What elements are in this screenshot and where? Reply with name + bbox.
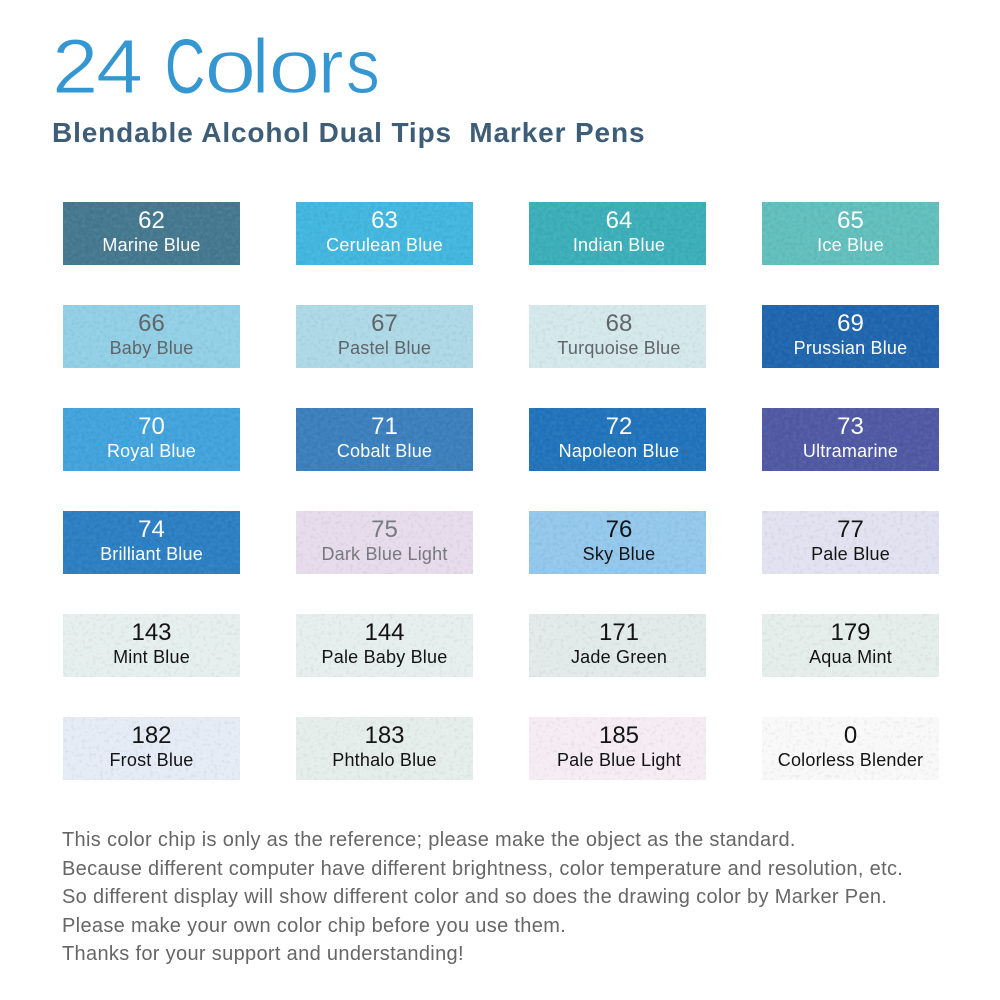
swatch: 76 Sky Blue: Sky Blue <box>583 544 655 564</box>
swatch: 171 Jade Green: 171 <box>599 619 639 646</box>
swatch: 185 Pale Blue Light <box>529 717 706 780</box>
swatch: 183 Phthalo Blue <box>296 717 473 780</box>
swatch: 65 Ice Blue: Ice Blue <box>817 235 884 255</box>
swatch: 77 Pale Blue: Pale Blue <box>811 544 890 564</box>
swatch: 64 Indian Blue: 64 <box>606 207 632 234</box>
swatch: 68 Turquoise Blue: Turquoise Blue <box>557 338 681 358</box>
title: 2 <box>52 24 98 110</box>
title: C <box>165 24 205 110</box>
swatch: 63 Cerulean Blue: Cerulean Blue <box>326 235 443 255</box>
swatch: 144 Pale Baby Blue: 144 <box>364 619 405 646</box>
swatch: 72 Napoleon Blue: Napoleon Blue <box>559 441 679 461</box>
swatch: 143 Mint Blue <box>63 614 240 677</box>
swatch: 77 Pale Blue <box>762 511 939 574</box>
swatch: 0 Colorless Blender <box>762 717 939 780</box>
disclaimer text: This color chip is only as the reference; please make the object as the standard. <box>62 829 796 851</box>
swatch: 179 Aqua Mint: 179 <box>830 619 871 646</box>
swatch: 67 Pastel Blue: 67 <box>371 310 398 337</box>
swatch: 182 Frost Blue <box>63 717 240 780</box>
swatch: 0 Colorless Blender: 0 <box>844 722 857 749</box>
swatch: 69 Prussian Blue: Prussian Blue <box>794 338 907 358</box>
swatch: 71 Cobalt Blue <box>296 408 473 471</box>
title: s <box>346 24 380 110</box>
swatch: 65 Ice Blue: 65 <box>837 207 864 234</box>
swatch: 64 Indian Blue: Indian Blue <box>573 235 665 255</box>
swatch: 75 Dark Blue Light: 75 <box>371 516 398 543</box>
title: r <box>318 24 344 110</box>
swatch: 62 Marine Blue <box>63 202 240 265</box>
swatch: 62 Marine Blue: Marine Blue <box>102 235 201 255</box>
swatch: 75 Dark Blue Light <box>296 511 473 574</box>
swatch: 69 Prussian Blue: 69 <box>837 310 864 337</box>
swatch: 74 Brilliant Blue: Brilliant Blue <box>100 544 203 564</box>
swatch: 67 Pastel Blue <box>296 305 473 368</box>
swatch: 66 Baby Blue <box>63 305 240 368</box>
swatch: 185 Pale Blue Light: Pale Blue Light <box>557 750 681 770</box>
swatch: 74 Brilliant Blue <box>63 511 240 574</box>
swatch: 171 Jade Green: Jade Green <box>571 647 667 667</box>
swatch: 71 Cobalt Blue: Cobalt Blue <box>337 441 432 461</box>
swatch: 76 Sky Blue: 76 <box>606 516 632 543</box>
swatch: 143 Mint Blue: Mint Blue <box>113 647 190 667</box>
swatch: 144 Pale Baby Blue <box>296 614 473 677</box>
swatch: 183 Phthalo Blue: 183 <box>364 722 405 749</box>
title: o <box>204 24 257 110</box>
swatch: 75 Dark Blue Light: Dark Blue Light <box>321 544 448 564</box>
swatch: 144 Pale Baby Blue: Pale Baby Blue <box>322 647 447 667</box>
title: l <box>252 24 269 110</box>
swatch: 182 Frost Blue: 182 <box>131 722 172 749</box>
swatch: 69 Prussian Blue <box>762 305 939 368</box>
disclaimer text: Thanks for your support and understanding! <box>62 943 464 965</box>
subtitle: Blendable Alcohol Dual Tips Marker Pens <box>52 117 645 148</box>
disclaimer text <box>62 829 903 965</box>
swatch: 73 Ultramarine: 73 <box>837 413 864 440</box>
swatch: 185 Pale Blue Light: 185 <box>599 722 639 749</box>
swatch: 76 Sky Blue <box>529 511 706 574</box>
swatch: 70 Royal Blue: Royal Blue <box>107 441 196 461</box>
swatch: 72 Napoleon Blue: 72 <box>606 413 632 440</box>
disclaimer text: So different display will show different color and so does the drawing color by Marker Pen. <box>62 886 887 908</box>
swatch: 68 Turquoise Blue <box>529 305 706 368</box>
swatch: 71 Cobalt Blue: 71 <box>371 413 398 440</box>
swatch: 65 Ice Blue <box>762 202 939 265</box>
swatch: 63 Cerulean Blue: 63 <box>371 207 398 234</box>
swatch: 182 Frost Blue: Frost Blue <box>109 750 194 770</box>
swatch: 0 Colorless Blender: Colorless Blender <box>778 750 923 770</box>
title: o <box>268 24 321 110</box>
swatch: 74 Brilliant Blue: 74 <box>138 516 165 543</box>
swatch: 143 Mint Blue: 143 <box>131 619 172 646</box>
title: 4 <box>96 24 143 110</box>
swatch: 73 Ultramarine: Ultramarine <box>803 441 898 461</box>
swatch: 66 Baby Blue: 66 <box>138 310 165 337</box>
title <box>52 24 380 110</box>
swatch: 171 Jade Green <box>529 614 706 677</box>
swatch: 67 Pastel Blue: Pastel Blue <box>338 338 431 358</box>
disclaimer text: Because different computer have different brightness, color temperature and resolution, etc. <box>62 858 903 880</box>
swatch: 73 Ultramarine <box>762 408 939 471</box>
swatch: 64 Indian Blue <box>529 202 706 265</box>
swatch: 63 Cerulean Blue <box>296 202 473 265</box>
swatch: 179 Aqua Mint: Aqua Mint <box>809 647 892 667</box>
swatch: 72 Napoleon Blue <box>529 408 706 471</box>
disclaimer text: Please make your own color chip before you use them. <box>62 914 566 936</box>
swatch: 179 Aqua Mint <box>762 614 939 677</box>
swatch: 70 Royal Blue: 70 <box>138 413 165 440</box>
swatch: 77 Pale Blue: 77 <box>837 516 864 543</box>
swatch: 70 Royal Blue <box>63 408 240 471</box>
swatch: 183 Phthalo Blue: Phthalo Blue <box>332 750 437 770</box>
swatch: 68 Turquoise Blue: 68 <box>606 310 632 337</box>
swatch: 62 Marine Blue: 62 <box>138 207 165 234</box>
swatch: 66 Baby Blue: Baby Blue <box>110 338 193 358</box>
